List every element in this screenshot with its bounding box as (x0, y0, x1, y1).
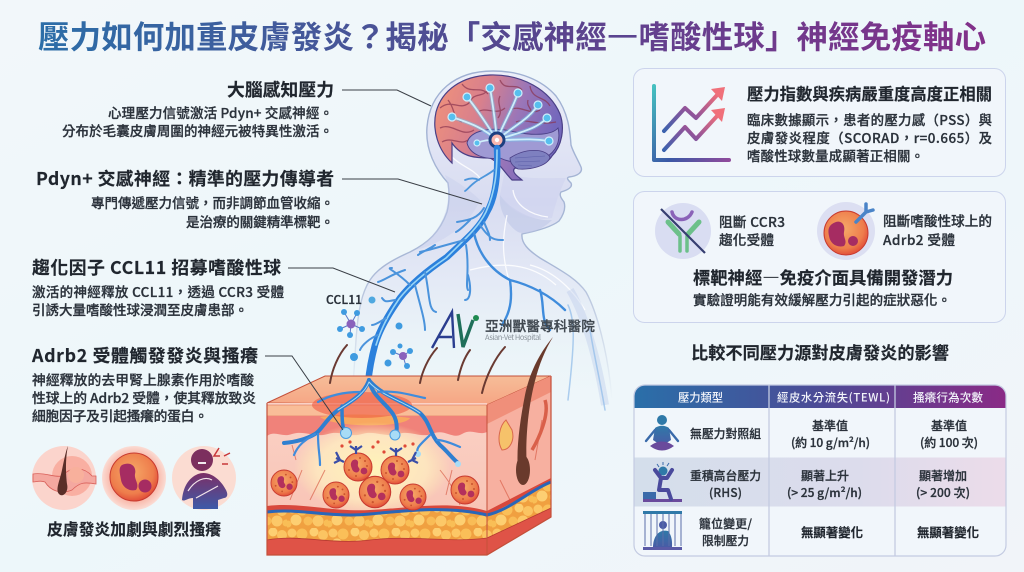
text: block Adrb2 (883, 210, 992, 249)
illustration: human bust (352, 71, 612, 405)
panel: therapeutic targets (634, 192, 1006, 322)
icon: person on platform (643, 462, 682, 502)
sub: eosinophils (271, 453, 479, 510)
left text: Adrb2: 神經釋放的去甲腎上腺素作用於嗜酸 (32, 369, 254, 389)
icon: itching person (172, 446, 236, 510)
row: no stress: 無壓力對照組 (690, 425, 761, 442)
row: no stress (646, 415, 978, 451)
left text: CCL11 (32, 254, 284, 319)
left text: brain perception: 大腦感知壓力 (227, 76, 334, 102)
row: RHS: (> 25 g/m²/h) (787, 484, 862, 501)
row: cage change: 籠位變更/ (699, 515, 752, 532)
left text: brain perception (62, 76, 334, 140)
text: block CCR3: 趨化受體 (719, 229, 774, 249)
icon: caged person (643, 511, 682, 550)
text: block Adrb2: Adrb2 受體 (883, 229, 955, 249)
icon: eosinophil (102, 446, 166, 510)
icon: rising chart (654, 86, 729, 160)
left text: Adrb2: 細胞因子及引起搔癢的蛋白。 (32, 405, 208, 425)
row: no stress: (約 100 次) (920, 434, 978, 451)
row: no stress: (約 10 g/m²/h) (791, 434, 870, 451)
row: RHS: 顯著增加 (919, 467, 967, 484)
row: no stress: 基準值 (931, 417, 967, 434)
left text: brain perception: 心理壓力信號激活 Pdyn+ 交感神經。 (108, 102, 333, 122)
icon: block Adrb2 (817, 202, 875, 260)
text: block CCR3 (719, 211, 785, 249)
row: cage change: 無顯著變化 (917, 523, 979, 541)
row: RHS (643, 462, 970, 502)
leader lines (265, 90, 482, 430)
left text: Adrb2: 性球上的 Adrb2 受體，使其釋放致炎 (32, 387, 256, 407)
panel: correlation: 嗜酸性球數量成顯著正相關。 (747, 145, 924, 165)
table: stress comparison (634, 385, 1006, 556)
panel: correlation (634, 68, 1006, 176)
left text: Pdyn+ nerve (36, 165, 334, 231)
left text: CCL11: 引誘大量嗜酸性球浸潤至皮膚患部。 (32, 299, 248, 319)
row: cage change: 限制壓力 (702, 532, 749, 549)
watermark logo: Asian-Vet Hospital (485, 332, 541, 343)
panel: correlation: 皮膚發炎程度（SCORAD，r=0.665）及 (747, 127, 992, 147)
panel: therapeutic targets: 標靶神經—免疫介面具備開發潛力 (693, 264, 953, 289)
left text: Pdyn+ nerve: Pdyn+ 交感神經：精準的壓力傳導者 (36, 165, 334, 191)
left text: Adrb2: Adrb2 受體觸發發炎與搔癢 (31, 342, 258, 368)
title: 壓力如何加重皮膚發炎？揭秘「交感神經—嗜酸性球」神經免疫軸心 (38, 13, 986, 58)
panel: correlation: 壓力指數與疾病嚴重度高度正相關 (747, 81, 992, 105)
text: block Adrb2: 阻斷嗜酸性球上的 (883, 210, 992, 230)
row: cage change (643, 511, 979, 550)
row: RHS: (RHS) (709, 484, 742, 501)
illustration: brain (435, 75, 562, 180)
row: cage change: 無顯著變化 (801, 523, 863, 541)
left text: Pdyn+ nerve: 專門傳遞壓力信號，而非調節血管收縮。 (91, 192, 334, 212)
header row: 壓力類型 (678, 390, 723, 406)
header row: 搔癢行為次數 (913, 390, 983, 406)
panel: correlation: 臨床數據顯示，患者的壓力感（PSS）與 (747, 109, 992, 129)
watermark logo: 亞洲獸醫專科醫院 (485, 315, 595, 335)
header row (678, 390, 983, 406)
icon: block CCR3 (655, 203, 711, 259)
header row: 經皮水分流失(TEWL) (777, 390, 890, 406)
icon: meditating person (646, 415, 678, 450)
row: RHS: 顯著上升 (801, 467, 849, 484)
watermark logo (432, 312, 595, 348)
illustration: nerve tree (360, 148, 605, 410)
text: block CCR3: 阻斷 CCR3 (719, 211, 785, 231)
left text: CCL11: 趨化因子 CCL11 招募嗜酸性球 (32, 254, 281, 280)
illustration: skin cross-section (267, 337, 553, 555)
panel: therapeutic targets: 實驗證明能有效緩解壓力引起的症狀惡化。 (693, 289, 951, 309)
left text: Adrb2 (31, 342, 258, 425)
left text: Pdyn+ nerve: 是治療的關鍵精準標靶。 (186, 211, 334, 231)
left text: brain perception: 分布於毛囊皮膚周圍的神經元被特異性激活。 (62, 120, 333, 140)
row: no stress: 基準值 (812, 417, 848, 434)
row: RHS: 重積高台壓力 (690, 467, 761, 484)
illustration: CCL11 molecules (326, 291, 413, 369)
caption: worsened skin inflammation: 皮膚發炎加劇與劇烈搔癢 (47, 517, 221, 540)
heading: comparison: 比較不同壓力源對皮膚發炎的影響 (691, 339, 949, 364)
left text: CCL11: 激活的神經釋放 CCL11，透過 CCR3 受體 (32, 281, 284, 301)
illustration: CCL11 molecules: CCL11 (326, 291, 362, 308)
icon: inflamed hair follicle (32, 446, 96, 510)
sub: nerve endings in skin (284, 380, 460, 465)
row: RHS: (> 200 次) (916, 484, 970, 501)
